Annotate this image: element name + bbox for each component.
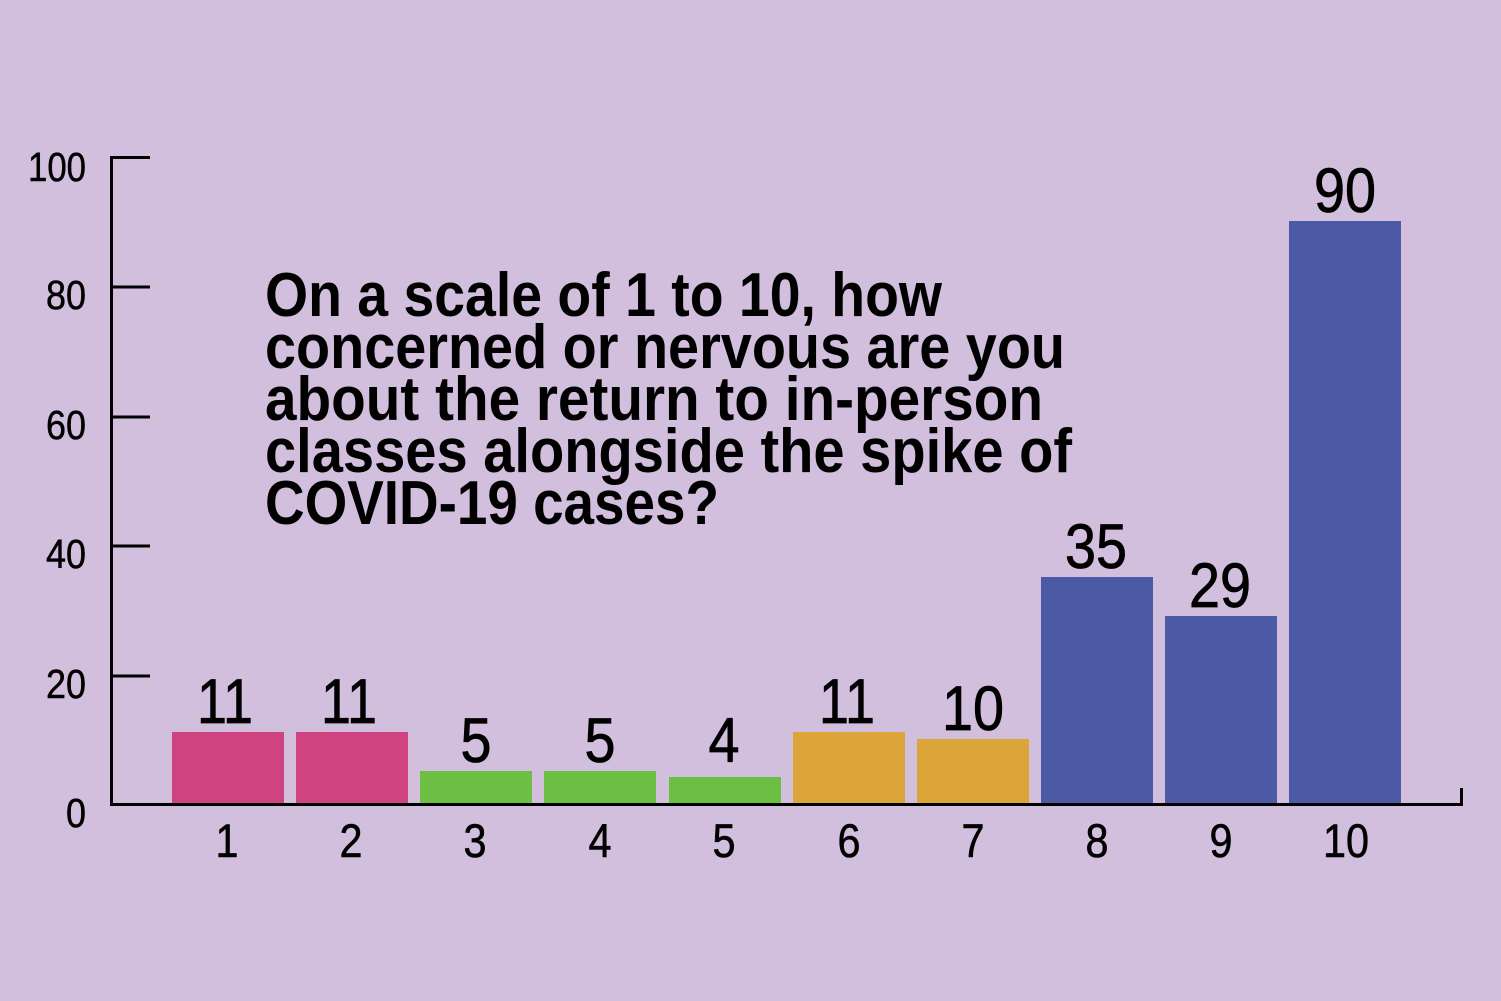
x axis (110, 788, 1462, 804)
bar value labels: 11 (819, 667, 875, 737)
x axis labels: 8 (1086, 814, 1108, 867)
y axis labels: 40 (46, 531, 86, 577)
question text (265, 261, 1072, 538)
x axis labels: 4 (588, 814, 612, 867)
y axis labels: 0 (66, 790, 86, 836)
bar value labels: 10 (942, 674, 1004, 744)
question text: COVID-19 cases? (265, 469, 719, 538)
x axis labels: 9 (1210, 814, 1232, 867)
bar value labels: 5 (460, 706, 492, 776)
bar value labels (197, 156, 1376, 776)
y axis (110, 156, 150, 805)
bar value labels: 11 (197, 667, 253, 737)
x axis labels: 7 (962, 814, 984, 867)
x axis labels: 6 (838, 814, 860, 867)
bar value labels: 4 (708, 706, 740, 776)
y axis labels: 20 (46, 661, 86, 707)
x axis labels: 5 (712, 814, 736, 867)
bars (172, 221, 1401, 803)
x axis labels: 1 (216, 814, 238, 867)
question text: classes alongside the spike of (265, 417, 1072, 486)
question text: about the return to in-person (265, 365, 1043, 434)
bar value labels: 5 (584, 706, 616, 776)
bar value labels: 29 (1189, 551, 1251, 621)
y axis labels (28, 144, 86, 836)
x axis labels (216, 814, 1369, 867)
bar value labels: 35 (1065, 512, 1127, 582)
x axis labels: 10 (1323, 814, 1369, 867)
y axis labels: 80 (46, 272, 86, 318)
x axis labels: 3 (464, 814, 486, 867)
question text: On a scale of 1 to 10, how (265, 261, 943, 330)
y axis labels: 100 (28, 144, 86, 190)
question text: concerned or nervous are you (265, 313, 1065, 382)
bar value labels: 11 (321, 667, 377, 737)
x axis labels: 2 (340, 814, 362, 867)
y axis labels: 60 (46, 402, 86, 448)
bar value labels: 90 (1314, 156, 1376, 226)
